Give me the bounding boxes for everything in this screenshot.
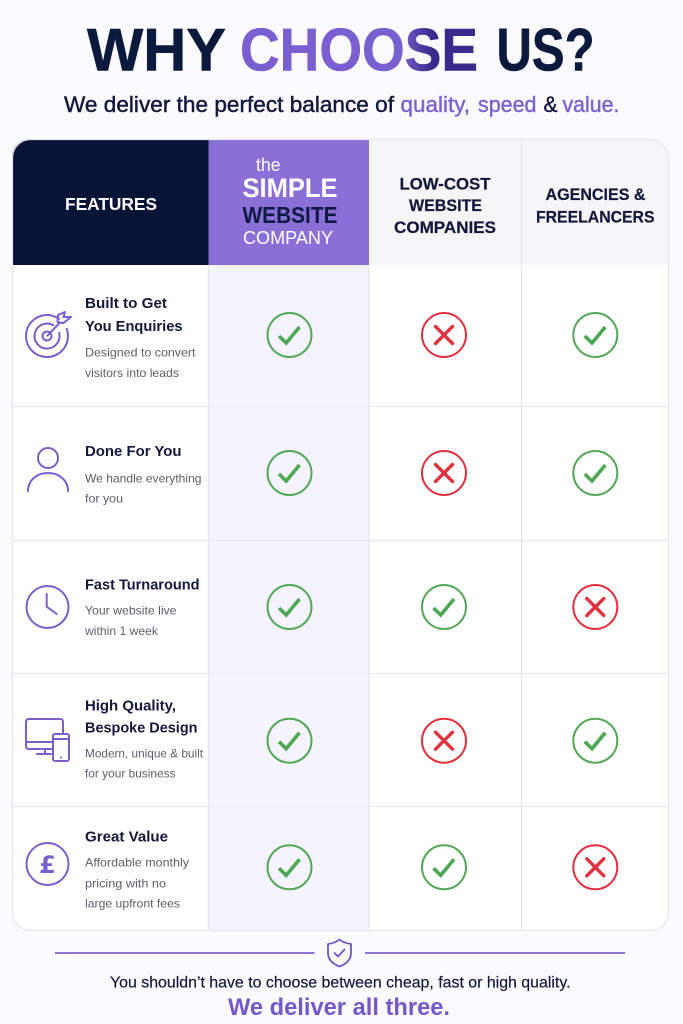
- feature text: Modern, unique & built: [85, 747, 204, 761]
- row: built to get you enquiries: [26, 295, 617, 380]
- icon: cross, low-cost: [422, 451, 466, 495]
- comparison table panel: [12, 139, 669, 931]
- row: high quality, bespoke design: [26, 698, 617, 781]
- feature text: Bespoke Design: [85, 720, 198, 737]
- icon: check, simple website company: [268, 585, 312, 629]
- subtitle: We deliver the perfect balance of: [64, 92, 395, 117]
- closing highlight: We deliver all three.: [228, 994, 450, 1021]
- feature text: for your business: [85, 767, 176, 781]
- icon: cross, agencies: [573, 585, 617, 629]
- icon: cross, low-cost: [422, 719, 466, 763]
- feature text: Affordable monthly: [85, 856, 189, 870]
- header: the simple website company: COMPANY: [243, 228, 333, 248]
- icon: person: [28, 448, 68, 491]
- header: low-cost website companies: [394, 174, 496, 237]
- header: low-cost website companies: WEBSITE: [409, 196, 482, 215]
- feature text: for you: [85, 492, 123, 506]
- header: features: FEATURES: [65, 194, 157, 214]
- row: done for you: [28, 443, 617, 506]
- feature text: [84, 576, 200, 638]
- feature text: You Enquiries: [85, 318, 182, 335]
- title: CHOOSE: [240, 16, 478, 84]
- title: US?: [496, 16, 594, 84]
- header: agencies and freelancers: [536, 185, 654, 226]
- icon: check, simple website company: [268, 313, 312, 357]
- icon: cross, low-cost: [422, 313, 466, 357]
- feature text: We handle everything: [85, 471, 202, 485]
- icon: check, simple website company: [268, 451, 312, 495]
- icon: check, low-cost: [422, 845, 466, 889]
- header: the simple website company: SIMPLE: [242, 173, 338, 203]
- icon: clock: [26, 586, 68, 628]
- feature text: pricing with no: [85, 876, 166, 890]
- header: agencies and freelancers: AGENCIES &: [546, 185, 646, 204]
- feature text: within 1 week: [84, 624, 159, 638]
- icon: target: [26, 312, 71, 357]
- icon: check, agencies: [573, 313, 617, 357]
- subtitle: speed: [478, 92, 536, 117]
- icon: pound: £: [39, 851, 56, 879]
- feature text: large upfront fees: [85, 896, 180, 910]
- feature text: Your website live: [85, 603, 177, 617]
- row: fast turnaround: [26, 576, 617, 638]
- feature text: [85, 829, 189, 910]
- icon: cross, agencies: [573, 845, 617, 889]
- feature text: Built to Get: [85, 295, 167, 312]
- subtitle: quality,: [400, 92, 470, 117]
- header: low-cost website companies: LOW-COST: [400, 174, 491, 194]
- header: agencies and freelancers: FREELANCERS: [536, 208, 654, 226]
- icon: shield: [328, 940, 351, 966]
- subtitle: [64, 92, 620, 117]
- header: the simple website company: the: [256, 155, 280, 175]
- title: [87, 16, 594, 84]
- icon: check, simple website company: [268, 719, 312, 763]
- feature text: [85, 295, 196, 380]
- header: low-cost website companies: COMPANIES: [394, 218, 496, 237]
- header: the simple website company: [242, 155, 338, 248]
- icon: check, low-cost: [422, 585, 466, 629]
- icon: check, simple website company: [268, 845, 312, 889]
- feature text: [85, 443, 202, 506]
- feature text: Fast Turnaround: [85, 576, 200, 593]
- feature text: Designed to convert: [85, 346, 196, 360]
- subtitle: &: [544, 92, 558, 117]
- feature text: High Quality,: [85, 698, 176, 715]
- feature text: visitors into leads: [85, 366, 179, 380]
- icon: check, agencies: [573, 451, 617, 495]
- icon: pound: [26, 843, 68, 885]
- subtitle: value.: [562, 92, 620, 117]
- feature text: Great Value: [85, 829, 168, 846]
- icon: check, agencies: [573, 719, 617, 763]
- feature text: Done For You: [85, 443, 182, 460]
- closing line: You shouldn’t have to choose between cheap, fast or high quality.: [110, 974, 570, 991]
- feature text: [85, 698, 204, 781]
- footer divider with shield: [55, 940, 625, 966]
- title: WHY: [87, 16, 226, 84]
- icon: monitor and phone: [26, 719, 69, 761]
- row: great value: [26, 829, 617, 910]
- header: the simple website company: WEBSITE: [242, 202, 338, 228]
